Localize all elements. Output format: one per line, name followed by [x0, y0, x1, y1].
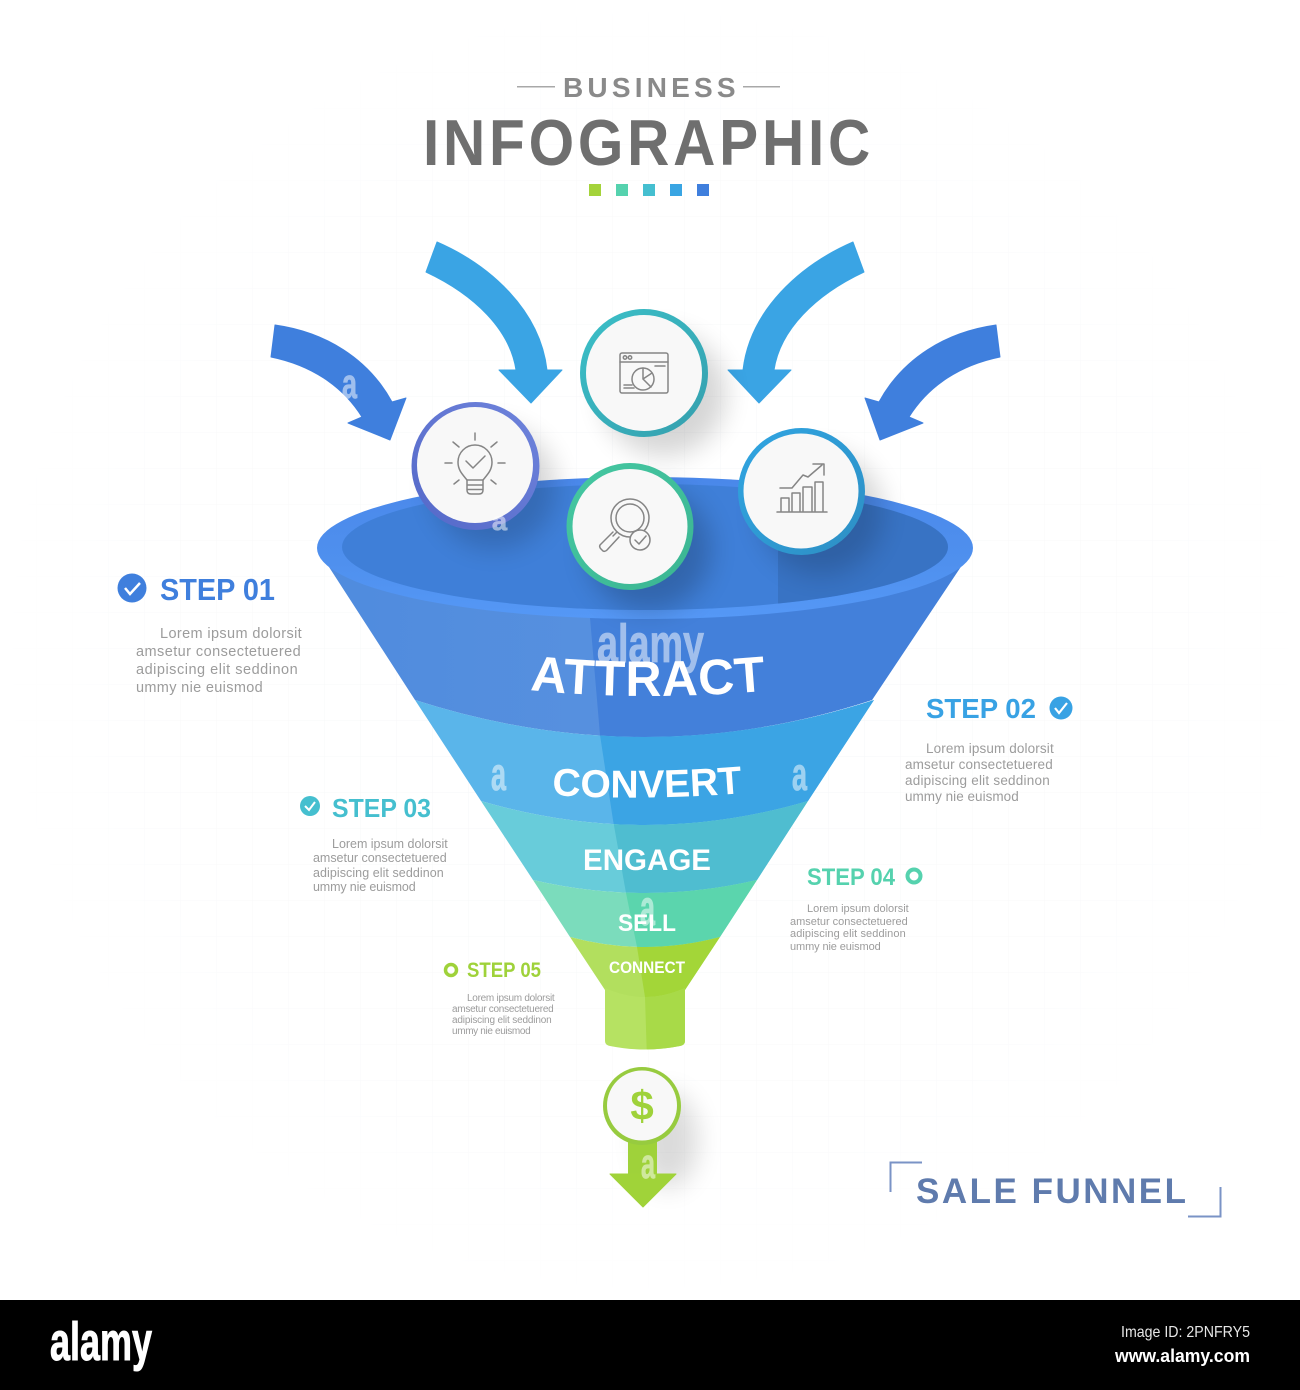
- step 03 text: ummy nie euismod: [313, 880, 416, 894]
- band: convert: [415, 700, 874, 825]
- icon: check blue: [118, 574, 146, 602]
- arrow: far left: [271, 325, 406, 440]
- funnel interior: [342, 480, 958, 615]
- step 02 text: Lorem ipsum dolorsit: [926, 741, 1054, 756]
- step 05 text: adipiscing elit seddinon: [452, 1015, 552, 1026]
- circle: magnifier: [566, 463, 711, 611]
- funnel: [317, 477, 973, 1050]
- dollar sign: $: [630, 1082, 654, 1129]
- step 01 text: ummy nie euismod: [136, 680, 263, 696]
- step 04 heading: STEP 04: [807, 864, 896, 891]
- step 04: [790, 864, 920, 953]
- step 03 text: [313, 837, 448, 894]
- step 03: [300, 793, 448, 894]
- circle: web analytics: [580, 309, 726, 456]
- watermarks: a: [641, 1140, 655, 1187]
- sale funnel label: [890, 1162, 1220, 1216]
- step 03 text: Lorem ipsum dolorsit: [332, 837, 448, 851]
- band: attract: [328, 566, 961, 737]
- output arrow: [610, 1092, 698, 1207]
- heading: business: BUSINESS: [563, 72, 740, 103]
- image id: Image ID: 2PNFRY5: [1121, 1324, 1250, 1341]
- icon: lightbulb: [445, 433, 505, 494]
- title rule right: [743, 86, 780, 88]
- step 05 text: Lorem ipsum dolorsit: [467, 993, 555, 1004]
- funnel mouth rim: [317, 477, 973, 619]
- step 02 text: ummy nie euismod: [905, 789, 1019, 804]
- step 02 text: amsetur consectetuered: [905, 757, 1053, 772]
- step 03 text: adipiscing elit seddinon: [313, 866, 444, 880]
- watermarks: a: [491, 748, 506, 800]
- label: connect: CONNECT: [609, 959, 685, 977]
- step 01 text: adipiscing elit seddinon: [136, 662, 298, 678]
- funnel spout: [605, 988, 685, 1050]
- step 05: [446, 959, 555, 1037]
- step 04 text: Lorem ipsum dolorsit: [807, 903, 909, 915]
- sale funnel text: SALE FUNNEL: [916, 1172, 1186, 1211]
- title rule left: [517, 86, 555, 88]
- icon: bar chart with arrow: [777, 464, 827, 512]
- label: convert: CONVERT: [554, 766, 740, 798]
- watermarks: a: [342, 360, 357, 407]
- dollar coin: [603, 1067, 681, 1145]
- icon: magnifier check: [600, 499, 650, 551]
- bracket corners: [890, 1162, 1220, 1216]
- icon: check light blue: [1050, 696, 1072, 720]
- band: engage: [481, 801, 808, 893]
- step 03 heading: STEP 03: [332, 793, 431, 823]
- step 05 text: amsetur consectetuered: [452, 1004, 554, 1015]
- step 04 text: amsetur consectetuered: [790, 916, 908, 928]
- circle: growth chart: [738, 428, 883, 575]
- footer band: [0, 1300, 1300, 1390]
- step 02 text: [905, 741, 1054, 804]
- step 05 heading: STEP 05: [467, 959, 541, 982]
- arrow: far right: [865, 325, 1000, 440]
- step 01 text: Lorem ipsum dolorsit: [160, 626, 302, 642]
- step 02 heading: STEP 02: [926, 693, 1036, 724]
- band: connect: [570, 937, 720, 1000]
- step 04 text: adipiscing elit seddinon: [790, 928, 906, 940]
- step 01: [118, 572, 302, 696]
- step 03 text: amsetur consectetuered: [313, 851, 447, 865]
- step 04 text: ummy nie euismod: [790, 941, 881, 953]
- heading: infographic: INFOGRAPHIC: [423, 107, 874, 180]
- step 01 heading: STEP 01: [160, 572, 275, 607]
- step 02 text: adipiscing elit seddinon: [905, 773, 1050, 788]
- watermarks: a: [792, 748, 807, 800]
- arrow: inner left: [426, 242, 562, 403]
- icon: check teal: [300, 796, 320, 816]
- watermarks: alamy: [597, 614, 704, 674]
- colour dots: [589, 184, 709, 196]
- circle: lightbulb: [412, 402, 556, 549]
- label: sell: SELL: [618, 910, 676, 937]
- watermarks: a: [640, 880, 656, 936]
- label: engage: ENGAGE: [583, 844, 711, 877]
- icon: ring lime: [446, 964, 456, 976]
- band: sell: [533, 880, 757, 947]
- step 05 text: ummy nie euismod: [452, 1026, 531, 1037]
- step 05 text: [452, 993, 555, 1037]
- footer url: www.alamy.com: [1114, 1346, 1250, 1366]
- label: attract: ATTRACT: [531, 656, 764, 696]
- footer logo: alamy: [50, 1312, 152, 1372]
- step 02: [905, 693, 1072, 804]
- step 01 text: [136, 626, 302, 696]
- watermarks: [342, 360, 807, 1187]
- watermarks: a: [492, 506, 508, 536]
- title: [423, 72, 874, 196]
- icon: ring green: [908, 870, 920, 882]
- step 01 text: amsetur consectetuered: [136, 644, 301, 660]
- step 04 text: [790, 903, 909, 953]
- arrow: inner right: [728, 242, 864, 403]
- icon: browser chart: [620, 353, 668, 393]
